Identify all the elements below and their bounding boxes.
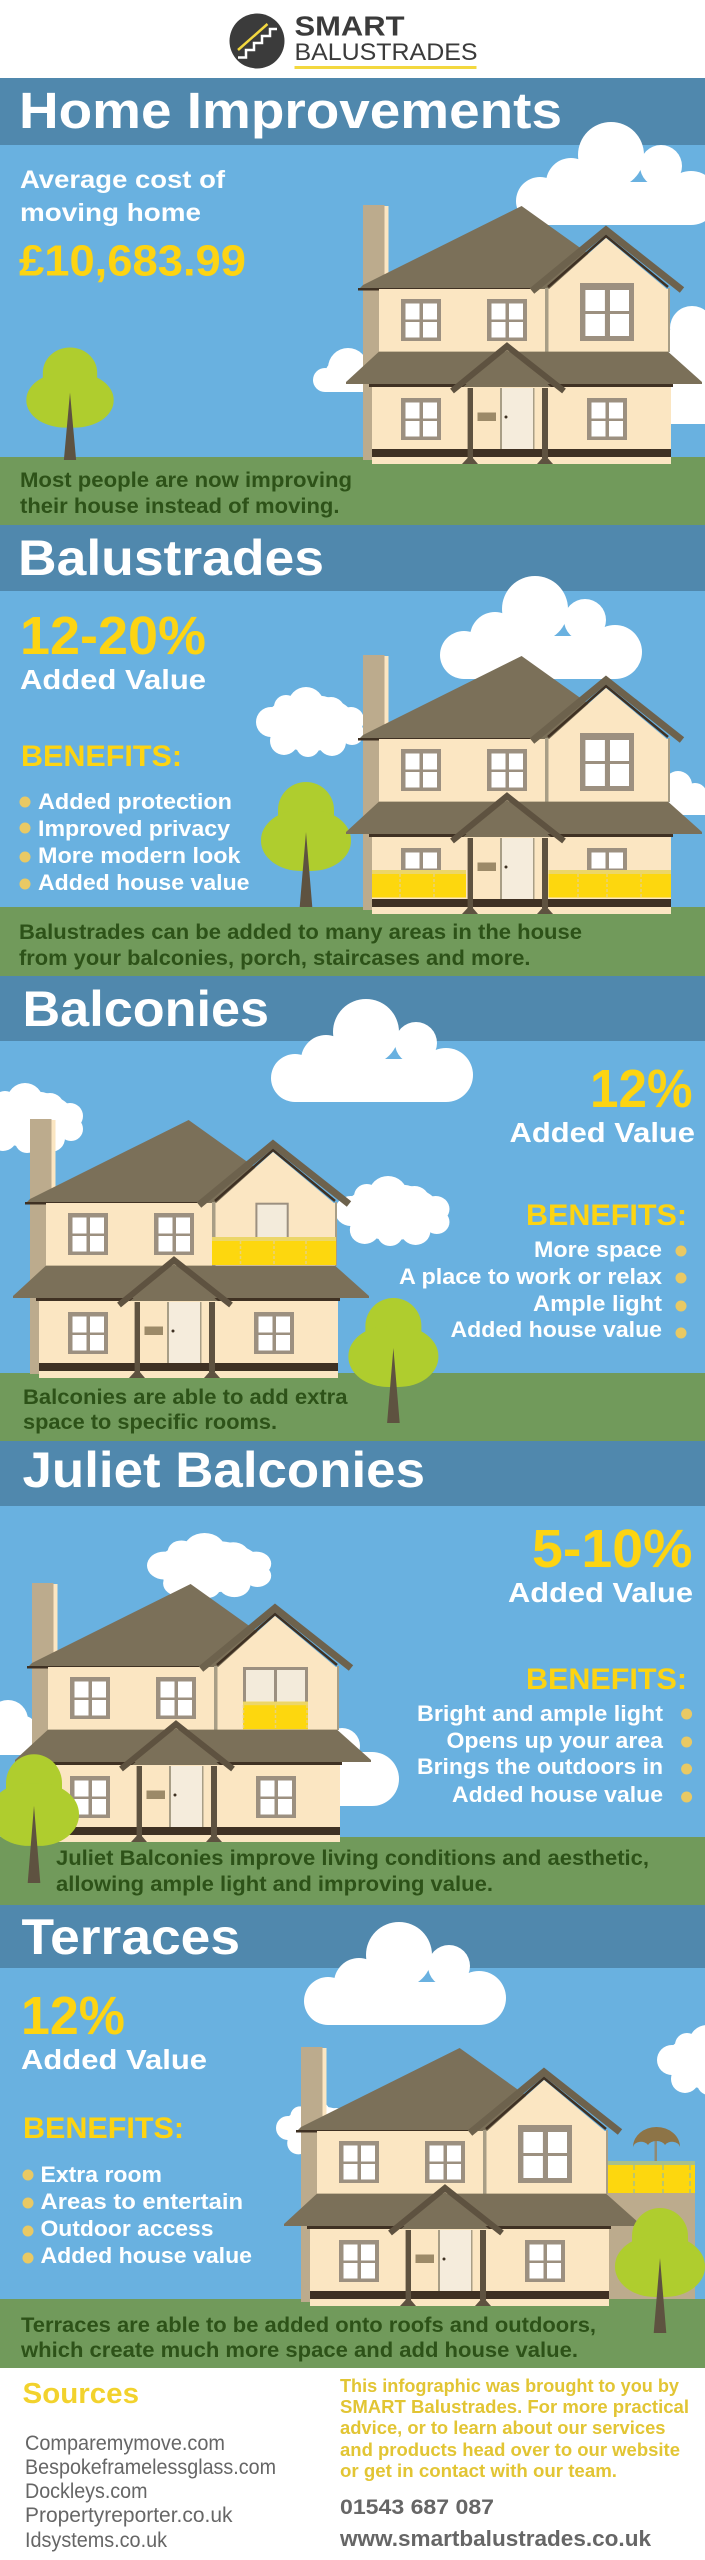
logo wordmark [294, 10, 478, 69]
benefits list: Added house value [38, 870, 250, 895]
caption: from your balconies, porch, staircases and more. [19, 947, 530, 970]
caption: Juliet Balconies improve living conditions and aesthetic, [56, 1847, 649, 1870]
stat: added value: 12% [21, 1986, 125, 2046]
caption [19, 921, 582, 970]
benefits list: Added house value [450, 1317, 662, 1342]
panel: Balustrades [0, 525, 705, 976]
house with Juliet balcony [15, 1583, 371, 1842]
stat: added value [20, 606, 206, 695]
caption [20, 2314, 596, 2362]
tree [348, 1298, 438, 1423]
logo wordmark: BALUSTRADES [294, 39, 478, 66]
grass [0, 1373, 705, 1441]
benefits heading: BENEFITS: [21, 740, 182, 773]
benefits heading: BENEFITS: [526, 1199, 687, 1232]
caption: Balconies are able to add extra [23, 1386, 348, 1409]
header band [0, 1441, 705, 1506]
house with balcony [13, 1119, 369, 1378]
clouds [276, 1922, 705, 2156]
terrace balustrade [607, 2161, 695, 2193]
caption: Balustrades can be added to many areas in the house [19, 921, 582, 944]
header band [0, 525, 705, 591]
clouds [256, 576, 705, 815]
stat: added value [508, 1519, 693, 1608]
stat: moving cost: £10,683.99 [19, 236, 246, 286]
terrace extension [602, 2127, 695, 2299]
clouds [313, 122, 705, 424]
benefits list: Added house value [452, 1782, 663, 1807]
logo [230, 10, 478, 69]
clouds [0, 1533, 399, 1806]
stat: added value [21, 1986, 207, 2075]
header band [0, 976, 705, 1041]
text: average cost: Average cost of [20, 166, 226, 194]
heading: Terraces [22, 1909, 240, 1965]
text: average cost: moving home [20, 199, 201, 227]
caption [23, 1386, 348, 1434]
call to action [340, 2376, 689, 2481]
grass [0, 1837, 705, 1905]
stat: added value [510, 1059, 695, 1148]
sources list: Comparemymove.com [25, 2432, 225, 2455]
house with ground floor balustrades [346, 655, 702, 914]
balustrade right [548, 870, 671, 898]
website: www.smartbalustrades.co.uk [339, 2526, 652, 2551]
benefits list: Added house value [40, 2243, 252, 2268]
benefits list: Opens up your area [446, 1728, 664, 1753]
benefits list: More space [534, 1237, 662, 1262]
call to action: and products head over to our website [340, 2440, 680, 2460]
stat: added value: Added Value [510, 1117, 695, 1148]
logo wordmark: SMART [294, 10, 404, 42]
house [346, 205, 702, 464]
benefits list: Added protection [38, 789, 232, 814]
panel: Home Improvements [0, 78, 705, 525]
benefits list [20, 789, 250, 895]
benefits list: Ample light [533, 1291, 663, 1316]
header band [0, 78, 705, 145]
sources list: Idsystems.co.uk [25, 2529, 167, 2552]
heading: Home Improvements [19, 82, 562, 139]
sources list: Bespokeframelessglass.com [25, 2456, 276, 2479]
benefits list: Extra room [40, 2162, 162, 2187]
balcony balustrade [212, 1237, 336, 1265]
sources heading: Sources [22, 2378, 139, 2410]
benefits list [22, 2162, 252, 2268]
phone number: 01543 687 087 [340, 2496, 494, 2519]
stat: added value: Added Value [508, 1577, 693, 1608]
heading: Juliet Balconies [22, 1442, 425, 1498]
benefits list: Outdoor access [40, 2216, 214, 2241]
house [284, 2047, 640, 2306]
clouds [0, 999, 473, 1246]
sky [0, 1041, 705, 1373]
tree [0, 1754, 79, 1883]
caption: allowing ample light and improving value. [56, 1873, 493, 1896]
benefits heading: BENEFITS: [526, 1663, 687, 1696]
caption: their house instead of moving. [20, 495, 340, 518]
stat: added value: Added Value [21, 2044, 207, 2075]
panel: footer [22, 2376, 689, 2552]
sky [0, 145, 705, 457]
heading: Balconies [22, 981, 269, 1037]
caption [56, 1847, 649, 1896]
balcony door [245, 1195, 303, 1239]
stat: added value: 12-20% [20, 606, 206, 666]
heading: Balustrades [18, 530, 324, 586]
benefits list [417, 1701, 692, 1807]
text: average cost [20, 166, 226, 227]
sky [0, 1506, 705, 1837]
logo emblem [230, 14, 284, 68]
Juliet balustrade [243, 1702, 308, 1729]
benefits list: Brings the outdoors in [417, 1754, 663, 1779]
tree [26, 348, 114, 460]
sources list: Propertyreporter.co.uk [25, 2504, 233, 2527]
benefits list: Areas to entertain [40, 2189, 243, 2214]
balustrade left [372, 870, 466, 898]
Juliet window [240, 1657, 310, 1729]
benefits list: Improved privacy [38, 816, 231, 841]
benefits list: A place to work or relax [399, 1264, 663, 1289]
caption: space to specific rooms. [23, 1411, 277, 1434]
panel: Balconies [0, 976, 705, 1441]
benefits list: Bright and ample light [417, 1701, 664, 1726]
call to action: SMART Balustrades. For more practical [340, 2397, 689, 2417]
parasol [633, 2127, 680, 2161]
stat: added value: 5-10% [532, 1519, 692, 1579]
caption: Terraces are able to be added onto roofs and outdoors, [21, 2314, 596, 2337]
sky [0, 1968, 705, 2299]
benefits list: More modern look [38, 843, 241, 868]
caption: Most people are now improving [20, 469, 352, 492]
grass [0, 2299, 705, 2368]
panel: Juliet Balconies [0, 1441, 705, 1905]
sources list: Dockleys.com [25, 2480, 148, 2503]
grass [0, 457, 705, 525]
tree [261, 782, 351, 907]
benefits heading: BENEFITS: [23, 2112, 184, 2145]
sky [0, 591, 705, 907]
header band [0, 1905, 705, 1968]
caption: which create much more space and add house value. [20, 2339, 578, 2362]
tree [615, 2208, 705, 2333]
stat: added value: 12% [590, 1059, 692, 1119]
call to action: This infographic was brought to you by [340, 2376, 679, 2396]
grass [0, 907, 705, 976]
benefits list [399, 1237, 686, 1342]
caption [20, 469, 352, 518]
call to action: or get in contact with our team. [340, 2461, 617, 2481]
call to action: advice, or to learn about our services [340, 2418, 666, 2438]
stat: added value: Added Value [20, 664, 206, 695]
panel: Terraces [0, 1905, 705, 2368]
sources list [25, 2432, 276, 2552]
